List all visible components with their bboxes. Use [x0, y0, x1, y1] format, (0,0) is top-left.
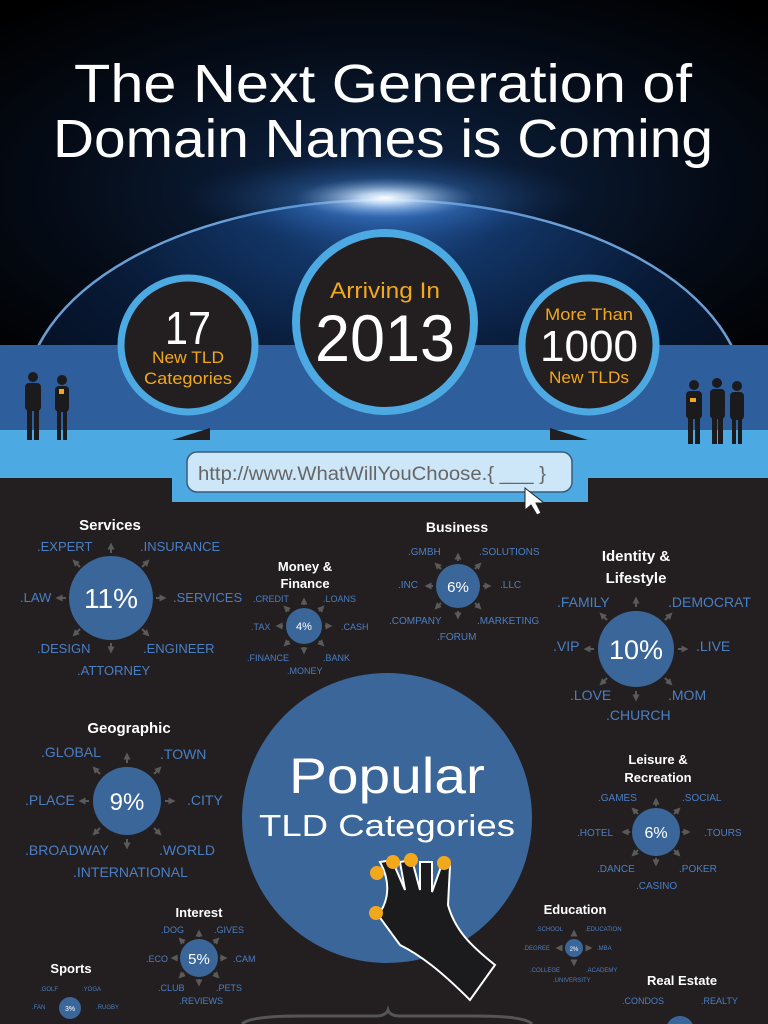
cluster: Business: .GMBH: [408, 547, 441, 558]
cluster: Interest: .CLUB: [158, 983, 185, 993]
cluster: Business: .SOLUTIONS: [479, 547, 540, 558]
cluster: Interest: .REVIEWS: [179, 996, 223, 1006]
cluster: Interest: .CAM: [233, 954, 256, 964]
title: The Next Generation of: [74, 54, 693, 114]
cluster: Money & Finance: .TAX: [251, 622, 270, 632]
cluster: Education: .EDUCATION: [585, 927, 622, 933]
cluster: Money & Finance: .CREDIT: [253, 594, 290, 604]
cluster: Services: Services: [79, 517, 141, 534]
title: Domain Names is Coming: [53, 109, 713, 169]
cluster: Geographic: [25, 720, 223, 880]
cluster: Geographic: .TOWN: [160, 746, 206, 762]
cluster: Money & Finance: .CASH: [341, 622, 369, 632]
cluster: Identity & Lifestyle: .MOM: [668, 687, 706, 703]
background sky: [0, 0, 768, 345]
cluster: Geographic: 9%: [110, 789, 144, 816]
popular circle: [242, 673, 532, 1000]
cluster: Real Estate: [622, 973, 738, 1024]
cluster: Leisure & Recreation: 6%: [644, 825, 668, 842]
cluster: Leisure & Recreation: .POKER: [679, 864, 717, 875]
cluster: Services: .ATTORNEY: [77, 663, 151, 678]
cluster: Business: .MARKETING: [477, 616, 539, 627]
stat circle: 17 categories: 17: [165, 302, 211, 354]
cluster: Leisure & Recreation: .DANCE: [597, 864, 635, 875]
cluster: Money & Finance: .FINANCE: [247, 653, 289, 663]
cluster: Geographic: .INTERNATIONAL: [73, 864, 188, 880]
stat circle: arriving 2013: Arriving In: [330, 278, 440, 303]
stat circle: 1000 TLDs: New TLDs: [549, 368, 629, 387]
cluster: Identity & Lifestyle: .FAMILY: [557, 594, 610, 610]
cluster: Geographic: Geographic: [87, 720, 171, 737]
cluster: Interest: .ECO: [146, 954, 168, 964]
cluster: Leisure & Recreation: Leisure &: [628, 752, 688, 767]
bottom brace: [242, 1010, 532, 1024]
cluster: Business: .INC: [398, 580, 418, 591]
popular circle: TLD Categories: [259, 808, 515, 843]
silhouettes left: [25, 372, 69, 440]
stat circle: 1000 TLDs: 1000: [540, 322, 638, 371]
cluster: Business: Business: [426, 519, 488, 535]
cluster: Leisure & Recreation: .HOTEL: [577, 828, 614, 839]
cluster: Sports: Sports: [50, 961, 92, 976]
cluster: Education: Education: [544, 902, 606, 917]
cluster: Geographic: .BROADWAY: [25, 842, 110, 858]
cluster: Identity & Lifestyle: .LOVE: [570, 687, 611, 703]
cluster: Interest: 5%: [188, 951, 210, 968]
cluster: Leisure & Recreation: .TOURS: [704, 828, 742, 839]
cluster: Sports: [32, 961, 119, 1019]
cluster: Real Estate: Real Estate: [647, 973, 717, 988]
cluster: Services: .DESIGN: [37, 641, 90, 656]
cluster: Money & Finance: [247, 559, 369, 676]
cluster: Sports: 3%: [65, 1006, 75, 1013]
stat circle: 17 categories: Categories: [144, 369, 232, 388]
stat circle: 1000 TLDs: More Than: [545, 305, 633, 324]
url bar banner: http://www.WhatWillYouChoose.{ ___ }: [198, 464, 546, 485]
silhouettes right: [686, 378, 744, 444]
cluster: Education: .DEGREE: [523, 946, 550, 952]
cluster: Geographic: .CITY: [187, 792, 223, 808]
cluster: Sports: .YOGA: [82, 987, 101, 993]
earth horizon: [38, 159, 732, 345]
cluster: Services: .LAW: [20, 590, 52, 605]
blue band: [0, 345, 768, 430]
cluster: Services: .INSURANCE: [140, 539, 221, 554]
cluster: Sports: .RUGBY: [96, 1005, 119, 1011]
title: [53, 54, 713, 169]
cluster: Leisure & Recreation: [577, 752, 742, 892]
cluster: Identity & Lifestyle: .DEMOCRAT: [668, 594, 751, 610]
cluster: Education: .MBA: [597, 946, 612, 952]
cluster: Money & Finance: Finance: [280, 576, 330, 591]
cluster: Leisure & Recreation: .SOCIAL: [682, 793, 722, 804]
cluster: Identity & Lifestyle: Lifestyle: [606, 570, 666, 587]
cluster: Education: .UNIVERSITY: [553, 978, 591, 984]
stat circle: 17 categories: [121, 278, 255, 412]
cluster: Identity & Lifestyle: .VIP: [553, 638, 579, 654]
cluster: Money & Finance: .LOANS: [323, 594, 356, 604]
cluster: Identity & Lifestyle: .LIVE: [696, 638, 730, 654]
cluster: Geographic: .GLOBAL: [41, 744, 101, 760]
cluster: Education: .COLLEGE: [530, 968, 560, 974]
cluster: Interest: Interest: [176, 905, 223, 920]
cluster: Identity & Lifestyle: 10%: [609, 635, 663, 665]
popular circle: Popular: [289, 748, 485, 804]
cluster: Business: .LLC: [500, 580, 521, 591]
cluster: Real Estate: .REALTY: [701, 996, 738, 1006]
cluster: Real Estate: .CONDOS: [622, 996, 664, 1006]
icon: cursor: [525, 488, 544, 515]
cluster: Interest: .PETS: [216, 983, 242, 993]
cluster: Education: [523, 902, 622, 984]
cluster: Services: .SERVICES: [173, 590, 242, 605]
cluster: Identity & Lifestyle: [553, 548, 751, 723]
cluster: Sports: .GOLF: [40, 987, 58, 993]
cluster: Interest: .DOG: [161, 925, 184, 935]
cluster: Geographic: .WORLD: [159, 842, 215, 858]
cluster: Money & Finance: .BANK: [323, 653, 350, 663]
cluster: Identity & Lifestyle: Identity &: [602, 548, 670, 565]
cluster: Education: .SCHOOL: [536, 927, 564, 933]
cluster: Sports: .FAN: [32, 1005, 45, 1011]
cluster: Services: .EXPERT: [37, 539, 92, 554]
cluster: Business: .COMPANY: [389, 616, 442, 627]
cluster: Leisure & Recreation: .CASINO: [636, 881, 677, 892]
cluster: Business: .FORUM: [437, 632, 476, 643]
cluster: Money & Finance: Money &: [278, 559, 332, 574]
url bar banner: [172, 428, 588, 515]
cluster: Money & Finance: .MONEY: [287, 666, 323, 676]
cluster: Geographic: .PLACE: [25, 792, 75, 808]
cluster: Business: [389, 519, 540, 643]
stat circle: 1000 TLDs: [522, 278, 656, 412]
cluster: Leisure & Recreation: Recreation: [624, 770, 692, 785]
cluster: Interest: [146, 905, 256, 1006]
cluster: Services: 11%: [84, 583, 138, 614]
cluster: Money & Finance: 4%: [296, 621, 312, 633]
icon: hand: [369, 853, 495, 1000]
stat circle: arriving 2013: [296, 233, 474, 411]
cluster: Interest: .GIVES: [214, 925, 244, 935]
cluster: Services: [20, 517, 242, 678]
stat circle: arriving 2013: 2013: [315, 301, 455, 375]
light blue band: [0, 430, 768, 478]
cluster: Services: .ENGINEER: [143, 641, 215, 656]
stat circle: 17 categories: New TLD: [152, 348, 224, 367]
cluster: Identity & Lifestyle: .CHURCH: [606, 707, 671, 723]
cluster: Education: .ACADEMY: [586, 968, 617, 974]
cluster: Education: 2%: [570, 947, 579, 953]
cluster: Leisure & Recreation: .GAMES: [598, 793, 637, 804]
cluster: Business: 6%: [447, 579, 469, 596]
